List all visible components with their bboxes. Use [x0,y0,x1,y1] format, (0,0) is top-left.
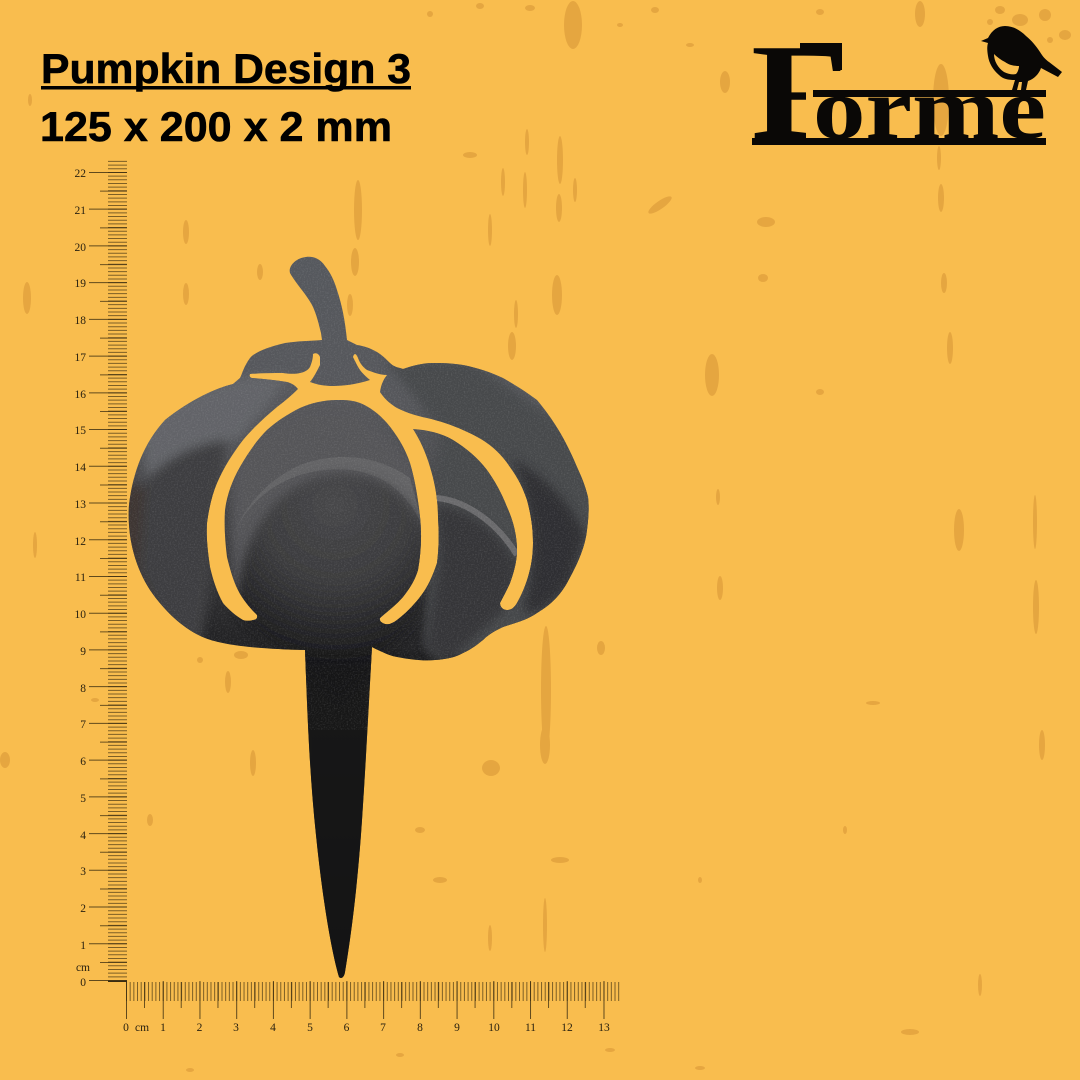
heading: product name: Pumpkin Design 3 [41,45,411,92]
pumpkin: centre band and dome [232,457,429,674]
ruler: vertical [74,160,127,989]
ruler: vertical: 19 [74,278,86,290]
logo wordmark: orme [813,61,1046,158]
ruler: horizontal: 5 [307,1022,313,1034]
pumpkin: centre lobe [232,405,418,640]
ruler: horizontal: cm [135,1022,149,1034]
ruler: vertical: 15 [74,425,86,437]
ruler: vertical: 20 [74,242,86,254]
ruler: vertical: 14 [74,462,86,474]
ruler: horizontal: 1 [160,1022,166,1034]
ruler: vertical: 8 [80,683,86,695]
ruler: vertical: 6 [80,756,86,768]
pumpkin: steel grain [120,250,600,730]
ruler: vertical: 22 [74,168,86,180]
ruler: horizontal: 8 [417,1022,423,1034]
ruler: vertical: 16 [74,389,86,401]
ruler: horizontal [123,992,620,1034]
ruler: vertical: 10 [74,609,86,621]
pumpkin: steel garden stake [120,250,600,985]
ruler: vertical: 0 [80,977,86,989]
ruler: vertical: 9 [80,646,86,658]
logo wordmark [752,43,1046,145]
ruler: vertical: 7 [80,719,86,731]
ruler: horizontal: 2 [197,1022,203,1034]
ruler: horizontal: 11 [525,1022,536,1034]
logo wordmark: F [751,16,848,168]
icon: robin [981,26,1062,90]
ruler: horizontal: 12 [561,1022,573,1034]
ruler: horizontal: 3 [233,1022,239,1034]
ruler: vertical: 13 [74,499,86,511]
ruler: vertical: 17 [74,352,86,364]
ruler: vertical: 18 [74,315,86,327]
ruler: horizontal: 13 [598,1022,610,1034]
heading: dimensions: 125 x 200 x 2 mm [40,103,392,150]
ruler: horizontal: 6 [344,1022,350,1034]
ruler: horizontal: 4 [270,1022,276,1034]
pumpkin: left lobe shading [128,373,286,638]
ruler: vertical: 11 [75,572,86,584]
pumpkin: right lobes [385,360,600,670]
ruler: vertical: 1 [80,940,86,952]
ruler: vertical: 12 [74,536,86,548]
ruler: vertical: 3 [80,866,86,878]
ruler: horizontal: 0 [123,1022,129,1034]
logo: Forme with bird [752,26,1062,145]
ruler: vertical: 4 [80,830,86,842]
ruler: vertical: 5 [80,793,86,805]
ruler: horizontal: 7 [380,1022,386,1034]
ruler: vertical: cm [76,962,90,974]
ruler: horizontal: 10 [488,1022,500,1034]
ruler: vertical: 2 [80,903,86,915]
ruler: horizontal: 9 [454,1022,460,1034]
ruler: vertical: 21 [74,205,86,217]
pumpkin: stake shadow [305,655,458,978]
